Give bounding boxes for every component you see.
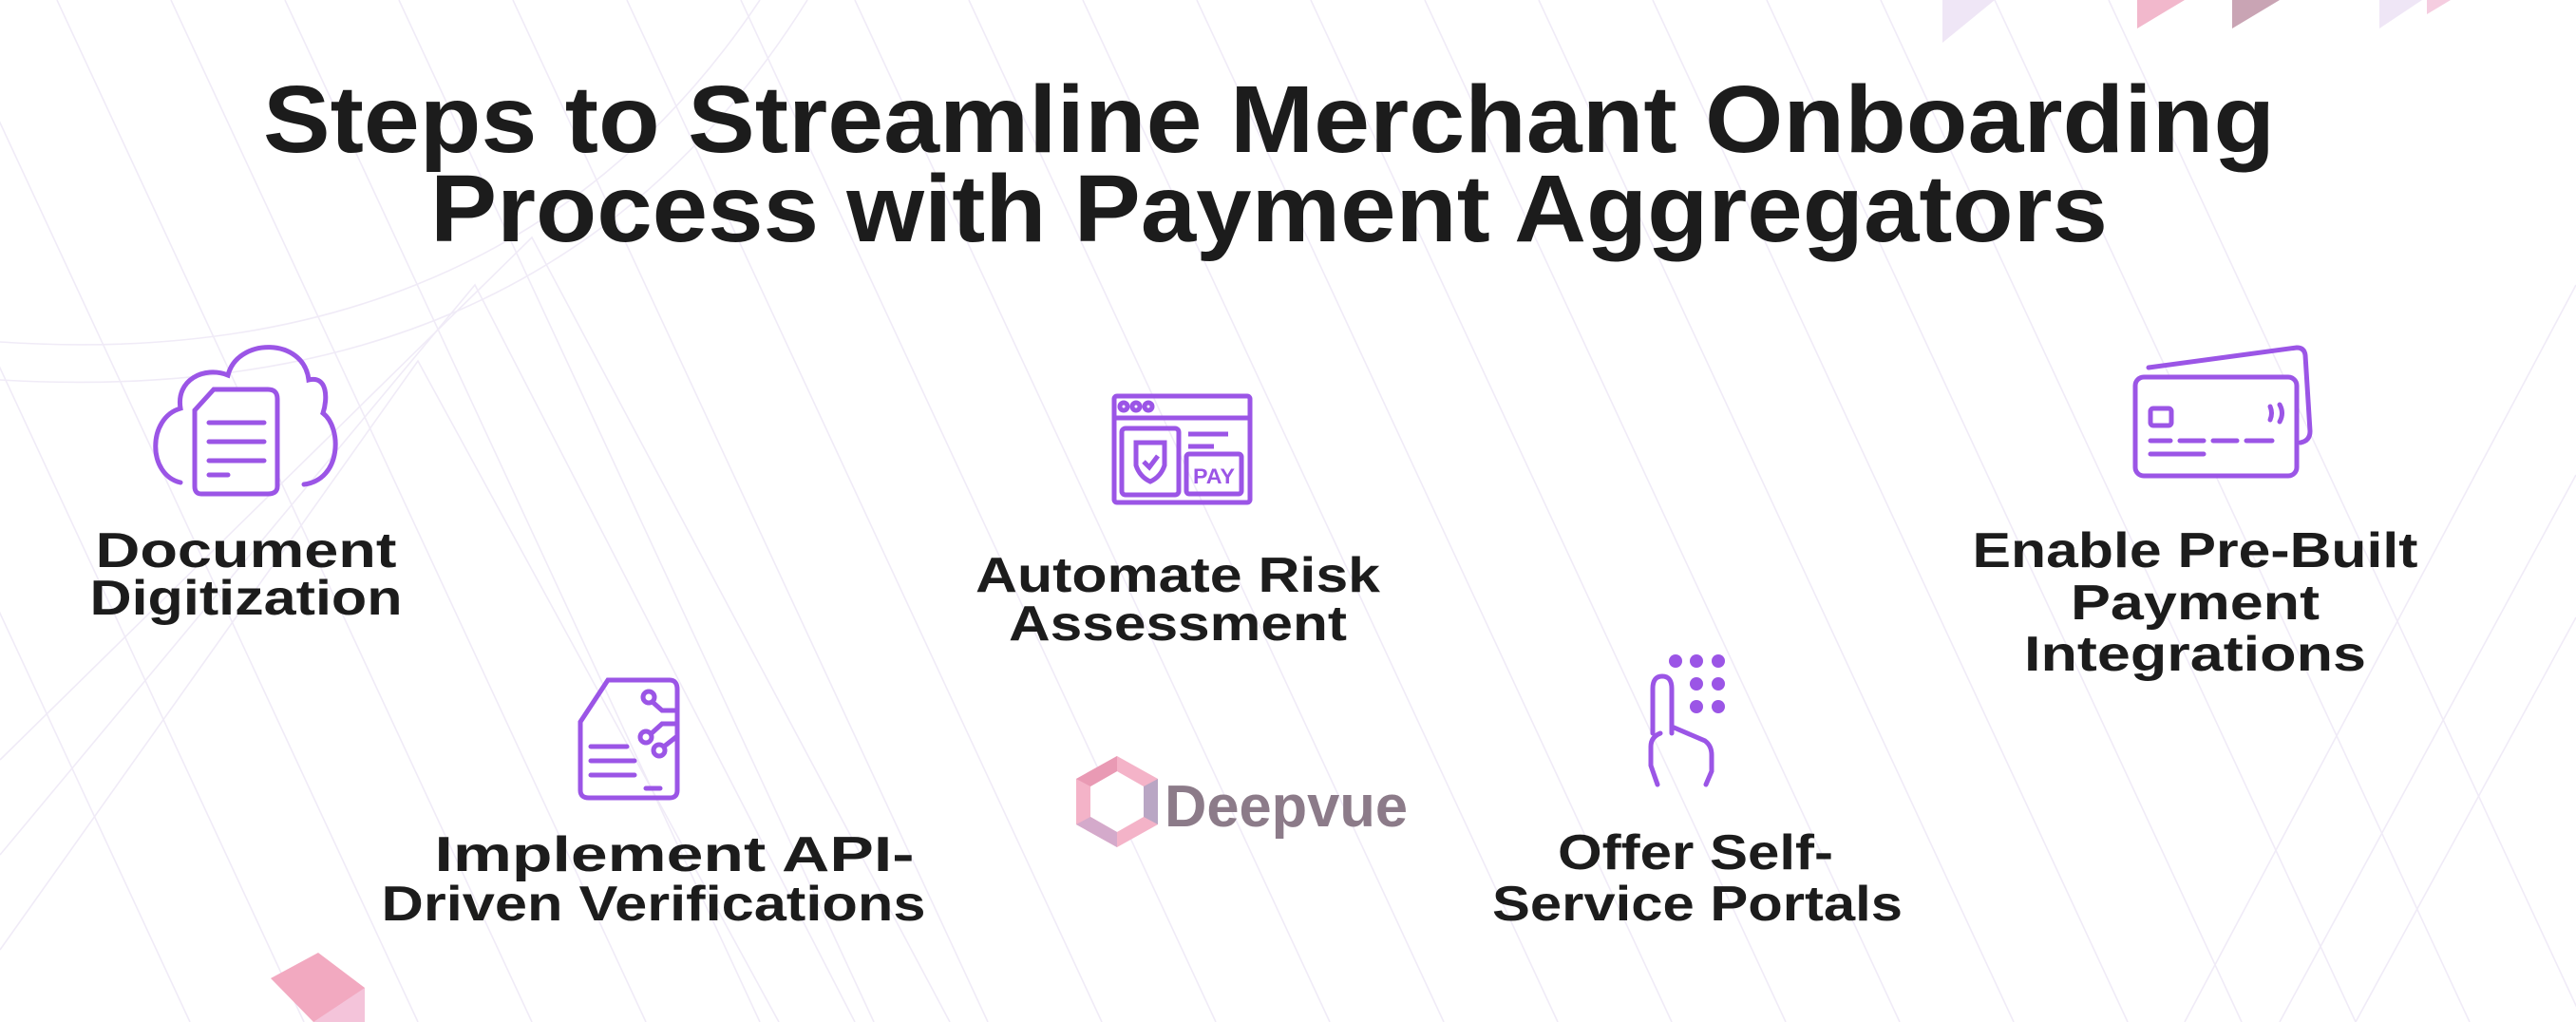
title: Process with Payment Aggregators xyxy=(430,156,2108,262)
step: Automate Risk Assessment: PAY xyxy=(1193,464,1235,488)
label: Implement API- xyxy=(435,827,914,882)
step: Automate Risk Assessment xyxy=(975,396,1380,652)
logo: Deepvue: Deepvue xyxy=(1165,774,1408,840)
label: Offer Self- xyxy=(1558,825,1833,880)
label: Automate Risk xyxy=(975,548,1380,603)
decoration: top right triangles xyxy=(1942,0,2451,43)
step: Automate Risk Assessment: Assessment xyxy=(1009,596,1347,652)
icon: browser pay xyxy=(1114,396,1250,502)
icon: api document xyxy=(580,680,677,798)
step: Enable Pre-Built Payment Integrations: Payment xyxy=(2071,576,2320,631)
decoration: bottom left diamond xyxy=(271,953,365,1022)
step: Offer Self-Service Portals xyxy=(1492,654,1903,932)
icon: cloud document xyxy=(156,348,335,494)
logo: Deepvue xyxy=(1076,756,1408,847)
label: Document xyxy=(95,523,397,578)
step: Offer Self-Service Portals: Service Portals xyxy=(1492,877,1903,932)
icon: touch keypad xyxy=(1669,654,1725,713)
icon: credit cards xyxy=(2135,348,2310,476)
label: Enable Pre-Built xyxy=(1972,523,2418,578)
title: Steps to Streamline Merchant Onboarding xyxy=(263,66,2275,173)
step: Enable Pre-Built Payment Integrations xyxy=(1972,348,2418,682)
step: Enable Pre-Built Payment Integrations: Integrations xyxy=(2024,627,2366,682)
step: Implement API-Driven Verifications: Driven Verifications xyxy=(382,877,925,932)
step: Document Digitization xyxy=(89,348,403,626)
step: Implement API-Driven Verifications xyxy=(382,680,925,932)
step: Document Digitization: Digitization xyxy=(89,571,403,626)
title xyxy=(263,66,2275,262)
